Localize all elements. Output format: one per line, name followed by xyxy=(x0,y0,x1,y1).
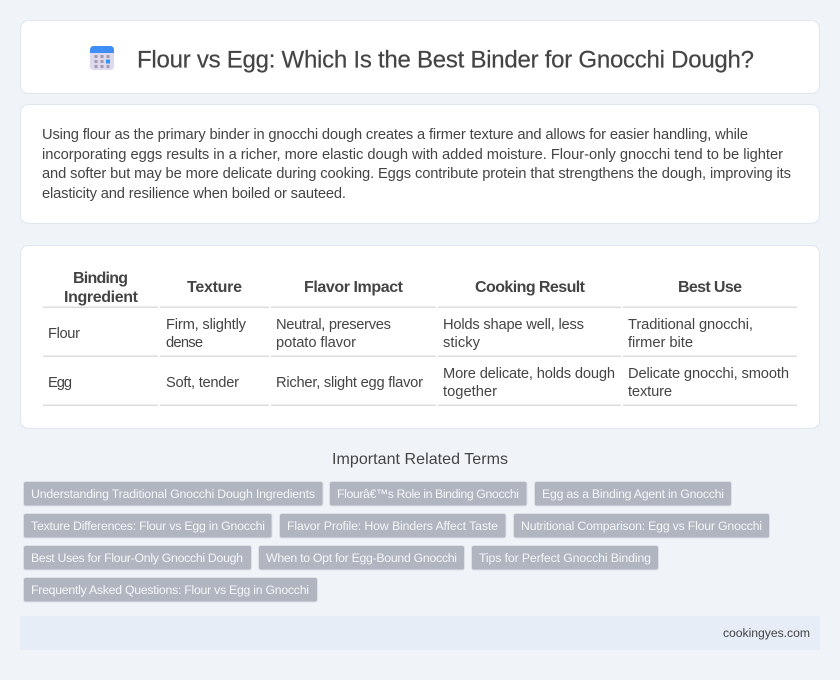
related term tags: Nutritional Comparison: Egg vs Flour Gnocchi xyxy=(521,519,762,533)
related term tags: Flavor Profile: How Binders Affect Taste xyxy=(287,519,498,533)
related term tags: Tips for Perfect Gnocchi Binding xyxy=(479,551,651,565)
table row: flour xyxy=(48,317,753,351)
table header row: Cooking Result xyxy=(475,279,586,296)
table row: egg: More delicate, holds dough xyxy=(443,366,615,382)
text block: intro: incorporating eggs results in a richer, more elastic dough with added moisture. Flour-only gnocchi tend to be lighter xyxy=(42,147,783,163)
related term tags: Frequently Asked Questions: Flour vs Egg in Gnocchi xyxy=(31,583,309,597)
related term tags: Flourâ€™s Role in Binding Gnocchi xyxy=(337,487,519,501)
related term tags xyxy=(24,482,770,602)
text block: intro: Using flour as the primary binder in gnocchi dough creates a firmer texture and allows for easier handling, while xyxy=(42,127,748,143)
related term tags: Understanding Traditional Gnocchi Dough Ingredients xyxy=(31,487,315,501)
table header row: Ingredient xyxy=(64,289,139,306)
table row: flour: potato flavor xyxy=(276,335,356,351)
panel: intro paragraph xyxy=(20,104,820,224)
related term tags: Best Uses for Flour-Only Gnocchi Dough xyxy=(31,551,243,565)
footer bar xyxy=(20,616,820,650)
table row: egg: Richer, slight egg flavor xyxy=(276,375,423,391)
related term tags: When to Opt for Egg-Bound Gnocchi xyxy=(266,551,457,565)
table row: egg: Egg xyxy=(48,375,72,391)
table row: egg: Delicate gnocchi, smooth xyxy=(628,366,789,382)
table row: flour: Firm, slightly xyxy=(166,317,247,333)
table row: flour: dense xyxy=(166,335,203,351)
table row: egg: Soft, tender xyxy=(166,375,239,391)
table row: flour: Holds shape well, less xyxy=(443,317,584,333)
table row: flour: firmer bite xyxy=(628,335,693,351)
text block: intro: and softer but may be more delicate during cooking. Eggs contribute protein that strengthens the dough, improving its xyxy=(42,166,791,182)
text block: intro xyxy=(42,127,791,202)
table row: egg xyxy=(48,366,789,400)
related term tags: Egg as a Binding Agent in Gnocchi xyxy=(542,487,724,501)
panel: comparison table xyxy=(20,246,820,428)
table header row: Texture xyxy=(187,279,242,296)
table row: flour: Traditional gnocchi, xyxy=(628,317,753,333)
table row: flour: Neutral, preserves xyxy=(276,317,391,333)
table header row: Best Use xyxy=(678,279,742,296)
table row: egg: together xyxy=(443,384,497,400)
table header row xyxy=(64,270,742,306)
table row: flour: Flour xyxy=(48,326,80,342)
related term tags: Texture Differences: Flour vs Egg in Gnocchi xyxy=(31,519,265,533)
footer source: cookingyes.com xyxy=(723,626,810,640)
table header row: Flavor Impact xyxy=(304,279,404,296)
text block: intro: elasticity and resilience when boiled or sauteed. xyxy=(42,186,346,202)
table row: egg: texture xyxy=(628,384,672,400)
heading: related terms: Important Related Terms xyxy=(332,451,508,468)
title: Flour vs Egg: Which Is the Best Binder for Gnocchi Dough? xyxy=(137,46,754,74)
table header row: Binding xyxy=(73,270,128,287)
icon: calendar xyxy=(90,46,114,70)
header panel xyxy=(20,20,820,94)
table row: flour: sticky xyxy=(443,335,481,351)
